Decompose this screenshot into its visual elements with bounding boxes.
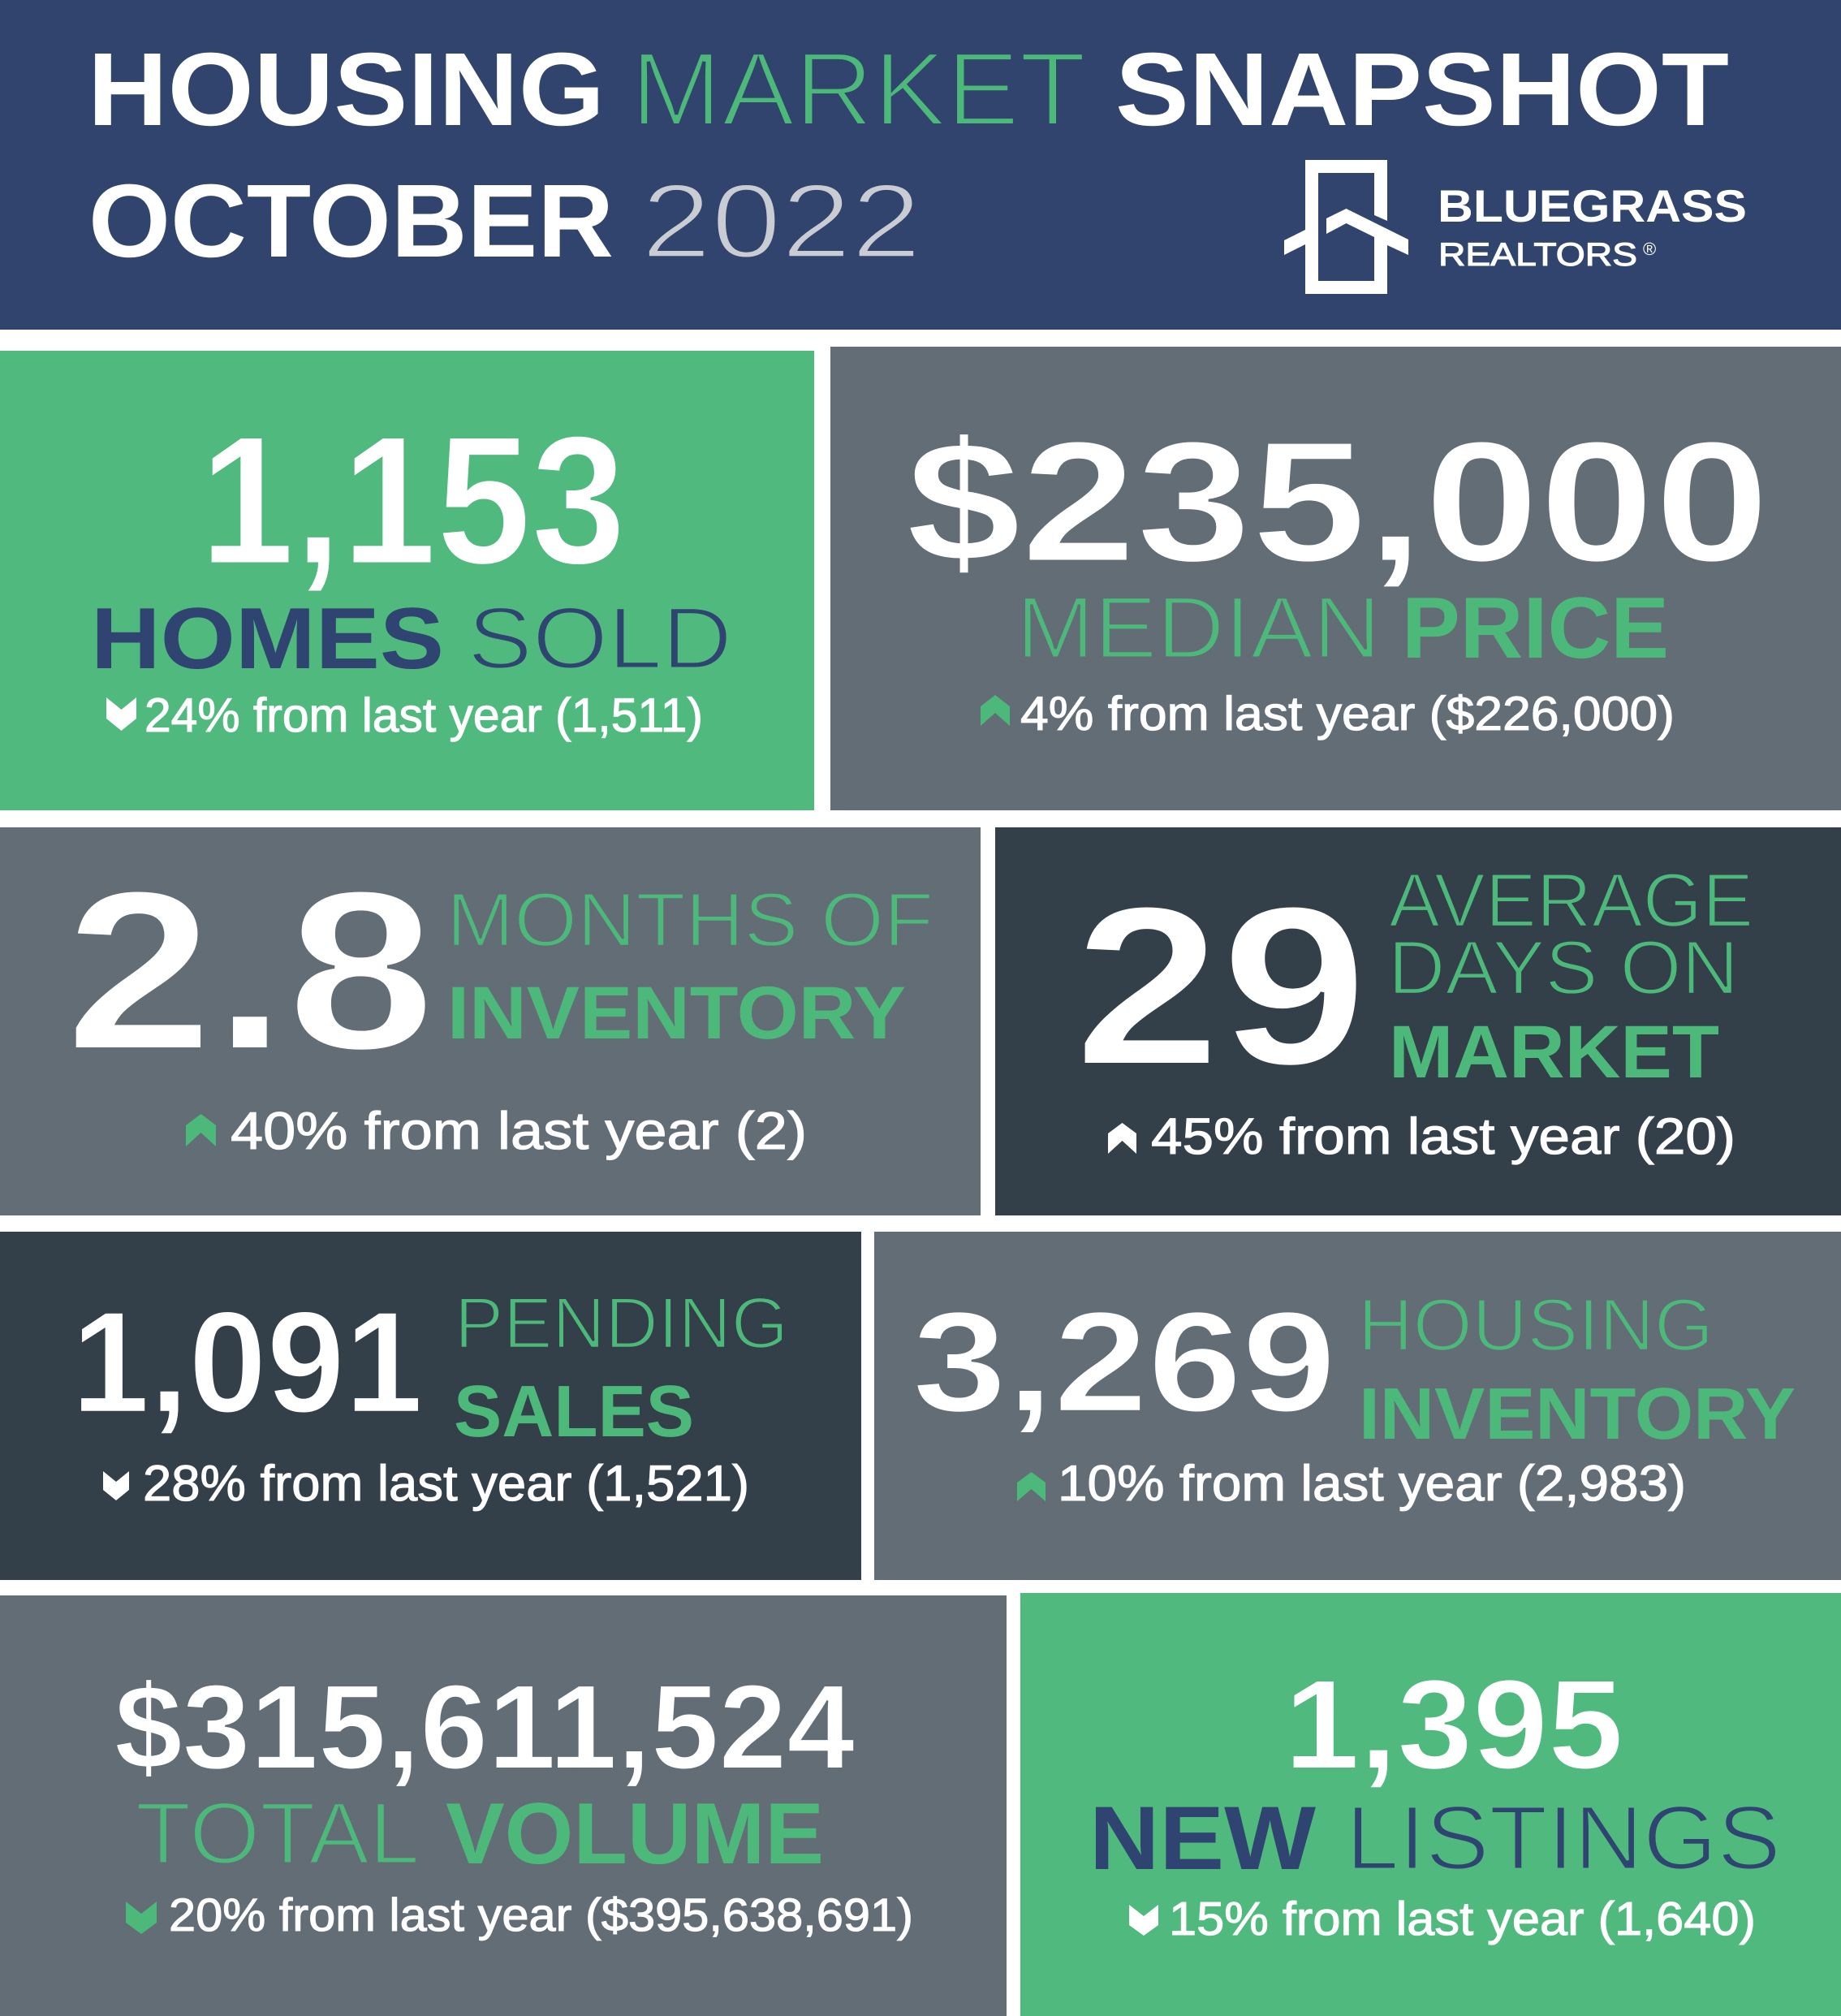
- number: days on market: 29: [1074, 860, 1368, 1113]
- number: homes sold: 1,153: [200, 397, 626, 602]
- panel: new listings: [1020, 1593, 1841, 2016]
- panel: homes sold: [0, 351, 814, 810]
- logo wordmark: BLUEGRASS: BLUEGRASS: [1438, 180, 1747, 231]
- icon: down arrow: [1129, 1905, 1158, 1936]
- title line 2 year: 2022: 2022: [641, 162, 921, 280]
- label: PENDING: PENDING: [455, 1282, 788, 1363]
- change text: 10% from last year (2,983): [1058, 1456, 1686, 1512]
- label: MARKET: MARKET: [1389, 1011, 1719, 1094]
- change text: 15% from last year (1,640): [1169, 1893, 1756, 1945]
- label: SOLD: SOLD: [468, 589, 732, 687]
- number: total volume: $315,611,524: [114, 1660, 855, 1794]
- label: LISTINGS: LISTINGS: [1346, 1787, 1781, 1889]
- panel: pending sales: [0, 1232, 861, 1580]
- logo registered mark: ®: [1643, 239, 1656, 259]
- panel: median price: [830, 347, 1841, 810]
- panel: header: [0, 0, 1841, 330]
- icon: down arrow: [103, 1471, 129, 1500]
- number: median price: $235,000: [906, 405, 1770, 598]
- icon: up arrow: [1017, 1472, 1046, 1501]
- label: VOLUME: VOLUME: [446, 1785, 824, 1882]
- number: housing inventory: 3,269: [912, 1283, 1336, 1442]
- label: TOTAL: TOTAL: [136, 1784, 420, 1882]
- label: HOUSING: HOUSING: [1358, 1284, 1714, 1366]
- label: SALES: SALES: [454, 1371, 694, 1453]
- panel: months of inventory: [0, 827, 981, 1215]
- change text: 28% from last year (1,521): [143, 1456, 749, 1512]
- icon: up arrow: [1108, 1123, 1136, 1154]
- label: INVENTORY: INVENTORY: [1359, 1374, 1796, 1455]
- panel: housing inventory: [874, 1232, 1841, 1580]
- change text: 40% from last year (2): [231, 1101, 807, 1160]
- title line 1 word: SNAPSHOT: SNAPSHOT: [1115, 32, 1729, 148]
- label: NEW: NEW: [1089, 1788, 1316, 1889]
- icon: down arrow: [126, 1902, 157, 1934]
- icon: down arrow: [106, 697, 136, 731]
- title line 1 word: HOUSING: HOUSING: [88, 32, 605, 148]
- label: HOMES: HOMES: [91, 589, 444, 687]
- icon: up arrow: [186, 1114, 216, 1146]
- label: MONTHS OF: MONTHS OF: [446, 877, 933, 962]
- number: new listings: 1,395: [1284, 1654, 1623, 1796]
- icon: up arrow: [981, 695, 1010, 726]
- logo wordmark: REALTORS: REALTORS: [1438, 237, 1637, 273]
- change text: 24% from last year (1,511): [144, 689, 703, 742]
- change text: 20% from last year ($395,638,691): [169, 1889, 913, 1941]
- label: INVENTORY: INVENTORY: [447, 972, 906, 1055]
- number: months of inventory: 2.8: [65, 844, 435, 1098]
- panel: total volume: [0, 1595, 1007, 2016]
- label: DAYS ON: DAYS ON: [1388, 925, 1739, 1010]
- change text: 4% from last year ($226,000): [1020, 687, 1675, 740]
- number: pending sales: 1,091: [71, 1281, 423, 1443]
- label: MEDIAN: MEDIAN: [1016, 578, 1381, 676]
- title line 1 word: MARKET: MARKET: [631, 31, 1086, 148]
- icon: Bluegrass Realtors house logo: [1284, 160, 1408, 294]
- title line 2 word: OCTOBER: OCTOBER: [88, 163, 614, 279]
- label: AVERAGE: AVERAGE: [1389, 857, 1753, 943]
- panel: average days on market: [995, 827, 1841, 1215]
- label: PRICE: PRICE: [1402, 579, 1669, 676]
- change text: 45% from last year (20): [1151, 1108, 1735, 1165]
